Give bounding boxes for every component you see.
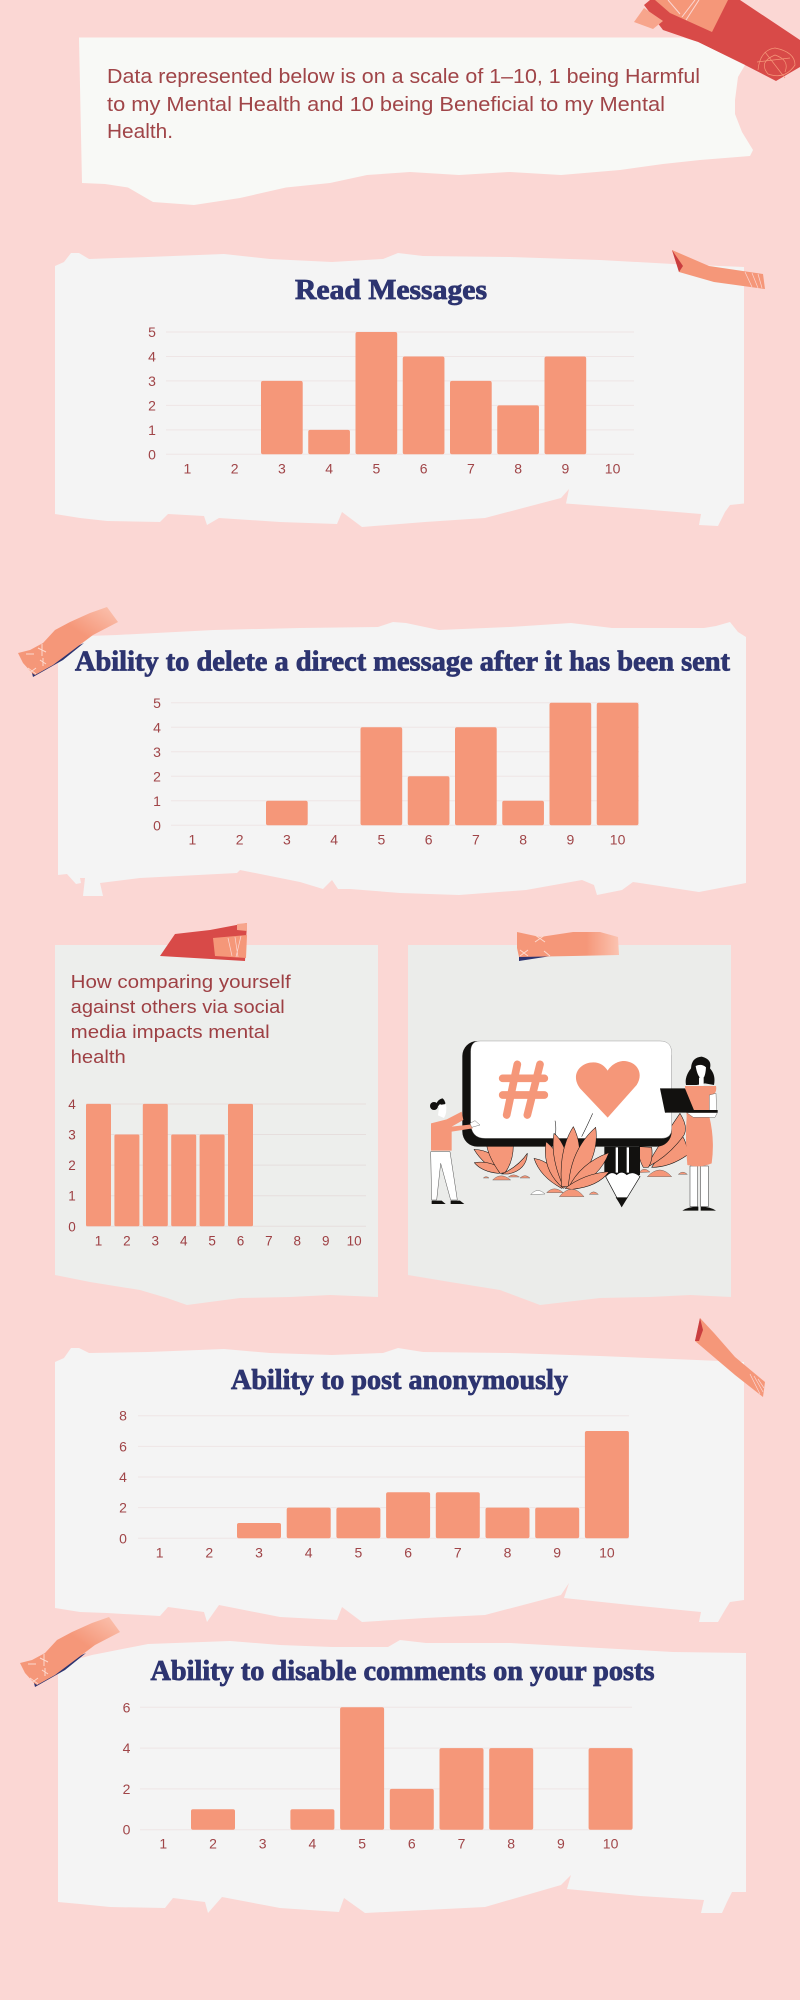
tape: illustration card [517, 932, 619, 961]
x axis labels: 8 [507, 1836, 515, 1852]
tape: read messages [672, 250, 765, 289]
x axis labels: 4 [305, 1545, 313, 1561]
y axis labels: 2 [153, 768, 161, 784]
bars [86, 1104, 253, 1226]
x axis labels: 9 [561, 461, 569, 477]
x axis labels: 9 [557, 1836, 565, 1852]
heading: Ability to post anonymously: Ability to post anonymously [231, 1365, 568, 1396]
tape: post anonymously [695, 1318, 765, 1397]
y axis labels: 3 [153, 744, 161, 760]
panel: Ability to disable comments [58, 1640, 746, 1913]
x axis labels: 1 [188, 832, 196, 848]
x axis labels: 9 [553, 1545, 561, 1561]
plant in front [531, 1113, 609, 1197]
x axis labels [183, 461, 621, 477]
panel: intro note [79, 38, 753, 205]
x axis labels: 10 [347, 1234, 362, 1248]
bars [266, 703, 638, 825]
heading: Read Messages: Read Messages [295, 275, 487, 306]
y axis labels: 0 [148, 446, 156, 462]
heading: comparing yourself: How comparing yourself [71, 972, 292, 992]
x axis labels: 10 [599, 1545, 615, 1561]
x axis labels: 6 [420, 461, 428, 477]
bar chart: Ability to disable comments [123, 1699, 633, 1852]
x axis labels: 2 [205, 1545, 213, 1561]
speech board [471, 1041, 672, 1138]
x axis labels: 7 [472, 832, 480, 848]
x axis labels: 6 [404, 1545, 412, 1561]
y axis labels: 3 [68, 1128, 76, 1142]
y axis labels [153, 695, 161, 833]
y axis labels: 0 [123, 1822, 131, 1838]
y axis labels: 6 [123, 1699, 131, 1715]
torn paper: post anonymously [55, 1348, 744, 1622]
board shadow [462, 1041, 672, 1147]
x axis labels: 4 [309, 1836, 317, 1852]
x axis labels: 9 [322, 1234, 329, 1248]
y axis labels: 1 [153, 793, 161, 809]
y axis labels: 6 [119, 1438, 127, 1454]
x axis labels: 7 [454, 1545, 462, 1561]
icon: hashtag [503, 1064, 544, 1115]
y axis labels: 0 [68, 1219, 76, 1234]
panel: Read Messages [55, 253, 744, 527]
panel: Ability to delete [58, 622, 746, 896]
panel: comparing yourself [55, 945, 378, 1305]
y axis labels: 1 [68, 1189, 76, 1204]
x axis labels: 1 [95, 1234, 102, 1248]
bar chart: Ability to post anonymously [119, 1408, 629, 1561]
bar chart: comparing yourself [68, 1097, 366, 1248]
intro text: Health. [107, 121, 173, 143]
x axis labels: 9 [566, 832, 574, 848]
x axis labels: 10 [603, 1836, 619, 1852]
y axis labels: 3 [148, 373, 156, 389]
y axis labels: 2 [119, 1500, 127, 1516]
tape: comparing yourself [160, 923, 247, 961]
y axis labels [123, 1699, 131, 1838]
y axis labels: 1 [148, 422, 156, 438]
torn paper: read messages [55, 253, 744, 527]
bar chart: Ability to delete [153, 695, 639, 848]
intro text: to my Mental Health and 10 being Beneficial to my Mental [107, 94, 665, 116]
torn paper: intro [79, 38, 753, 205]
y axis labels: 4 [153, 719, 161, 735]
heading: comparing yourself: against others via social [71, 997, 285, 1017]
bar chart: Read Messages [148, 324, 634, 477]
x axis labels: 8 [504, 1545, 512, 1561]
tape: delete message [18, 607, 118, 677]
x axis labels: 7 [265, 1234, 273, 1248]
x axis labels: 8 [514, 461, 522, 477]
heading: comparing yourself: media impacts mental [71, 1022, 270, 1042]
bars [191, 1707, 633, 1830]
icon: heart [576, 1061, 640, 1118]
y axis labels [148, 324, 156, 462]
x axis labels: 2 [123, 1234, 131, 1248]
paper: comparing yourself [55, 945, 378, 1305]
heading: Ability to disable comments: Ability to disable comments on your posts [150, 1656, 655, 1687]
x axis labels: 4 [180, 1234, 188, 1248]
intro text: Data represented below is on a scale of 1–10, 1 being Harmful [107, 66, 700, 88]
x axis labels: 6 [408, 1836, 416, 1852]
x axis labels: 1 [183, 461, 191, 477]
x axis labels: 7 [458, 1836, 466, 1852]
tape: top right [634, 0, 800, 81]
y axis labels: 0 [153, 817, 161, 833]
x axis labels: 3 [278, 461, 286, 477]
x axis labels: 8 [294, 1234, 301, 1248]
x axis labels: 10 [610, 832, 626, 848]
y axis labels [68, 1097, 76, 1234]
x axis labels: 2 [236, 832, 244, 848]
x axis labels: 5 [208, 1234, 216, 1248]
x axis labels: 7 [467, 461, 475, 477]
y axis labels: 4 [148, 348, 156, 364]
x axis labels: 6 [425, 832, 433, 848]
y axis labels: 4 [123, 1740, 131, 1756]
paper: illustration card [408, 945, 731, 1305]
x axis labels [95, 1234, 362, 1248]
x axis labels: 8 [519, 832, 527, 848]
bars [261, 332, 586, 454]
panel: illustration card [408, 945, 731, 1305]
x axis labels: 3 [259, 1836, 267, 1852]
y axis labels [119, 1408, 127, 1546]
x axis labels [156, 1545, 615, 1561]
torn paper: disable comments [58, 1640, 746, 1913]
illustration: social media hashtag and heart [430, 1041, 718, 1211]
x axis labels: 5 [358, 1836, 366, 1852]
x axis labels: 3 [283, 832, 291, 848]
x axis labels [159, 1836, 619, 1852]
x axis labels: 5 [377, 832, 385, 848]
x axis labels: 4 [330, 832, 338, 848]
x axis labels: 6 [237, 1234, 244, 1248]
x axis labels: 3 [255, 1545, 263, 1561]
x axis labels: 1 [156, 1545, 164, 1561]
x axis labels [188, 832, 626, 848]
y axis labels: 8 [119, 1408, 127, 1424]
y axis labels: 4 [68, 1097, 76, 1112]
x axis labels: 2 [231, 461, 239, 477]
x axis labels: 10 [605, 461, 621, 477]
bars [237, 1431, 629, 1538]
y axis labels: 2 [68, 1158, 76, 1173]
x axis labels: 5 [372, 461, 380, 477]
y axis labels: 5 [148, 324, 156, 340]
pencil [604, 1147, 640, 1207]
heading: comparing yourself: health [71, 1047, 126, 1067]
y axis labels: 2 [148, 398, 156, 414]
x axis labels: 4 [325, 461, 333, 477]
y axis labels: 4 [119, 1469, 127, 1485]
x axis labels: 2 [209, 1836, 217, 1852]
x axis labels: 5 [355, 1545, 363, 1561]
y axis labels: 2 [123, 1781, 131, 1797]
plants behind board [474, 1113, 687, 1180]
tape: disable comments [20, 1617, 120, 1687]
y axis labels: 0 [119, 1530, 127, 1546]
panel: Ability to post anonymously [55, 1348, 744, 1622]
figure: woman pointing [430, 1098, 480, 1204]
y axis labels: 5 [153, 695, 161, 711]
x axis labels: 1 [159, 1836, 167, 1852]
figure: woman with laptop [660, 1057, 718, 1211]
heading: Ability to delete: Ability to delete a direct message after it has been sent [75, 647, 731, 678]
x axis labels: 3 [152, 1234, 159, 1248]
torn paper: delete message [58, 622, 746, 896]
